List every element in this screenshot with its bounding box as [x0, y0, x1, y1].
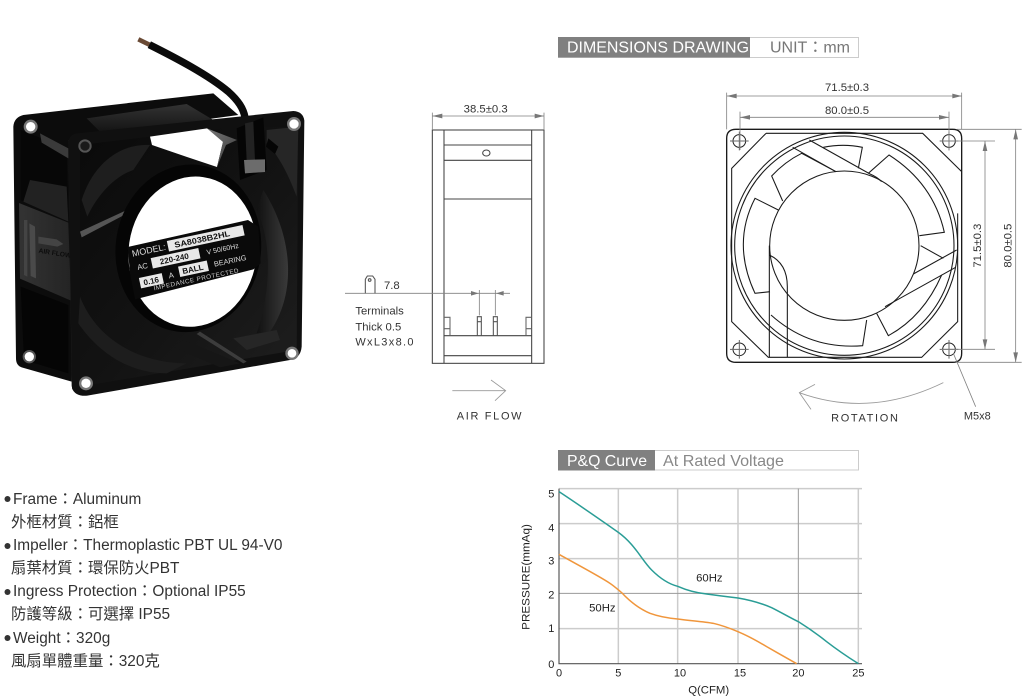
dimension: depth 38.5	[432, 104, 544, 130]
terminals note: Thick 0.5	[355, 321, 401, 333]
fan outline	[727, 129, 962, 362]
specification list	[4, 491, 282, 670]
header: dimensions drawing: UNIT：mm	[770, 40, 850, 56]
struts	[769, 140, 957, 357]
screw callout	[953, 353, 991, 423]
spec: frame: 外框材質：鋁框	[11, 513, 119, 531]
curve labels: 60Hz	[696, 573, 723, 585]
front frame	[68, 111, 304, 396]
label band: BEARING	[213, 253, 247, 269]
y axis ticks: 2	[548, 589, 554, 601]
y axis title: PRESSURE(mmAq)	[521, 524, 533, 630]
air flow arrow: AIR FLOW	[457, 411, 523, 423]
rear frame inner shading	[87, 104, 213, 132]
side view body	[432, 130, 544, 363]
50Hz label: 50Hz	[589, 602, 616, 614]
spec: ingress protection: 防護等級：可選擇 IP55	[11, 604, 170, 623]
spec: impeller: 扇葉材質：環保防火PBT	[11, 559, 180, 577]
rotation arrow: ROTATION	[831, 413, 900, 425]
terminals note: Terminals	[355, 306, 404, 318]
y axis ticks: 4	[548, 523, 554, 535]
product photo: axial fan	[13, 39, 304, 396]
dimension: height 80.0: 80.0±0.5	[1003, 224, 1015, 268]
front view drawing	[727, 82, 1022, 425]
header: dimensions drawing	[558, 37, 858, 58]
x axis ticks: 20	[792, 668, 804, 680]
spec: impeller	[4, 537, 282, 577]
x axis ticks: 10	[674, 668, 686, 680]
spec: weight: Weight：320g	[13, 630, 110, 647]
spec: ingress protection: Ingress Protection：Optional IP55	[13, 583, 246, 600]
hub white label	[119, 168, 267, 335]
x axis ticks: 5	[615, 668, 621, 680]
dimension: height 71.5: 71.5±0.3	[972, 224, 984, 268]
grey blade behind opening	[207, 128, 237, 167]
x axis title: Q(CFM)	[688, 684, 729, 696]
terminals note	[355, 306, 415, 349]
label band: AC	[136, 261, 149, 272]
dimension: height 80.0	[957, 129, 1022, 362]
curve: 60Hz	[559, 492, 858, 664]
dimension: height 71.5	[942, 141, 995, 349]
y axis ticks: 5	[548, 488, 554, 500]
P&Q line chart	[521, 488, 864, 696]
hub ring	[105, 155, 272, 342]
label band: A	[168, 270, 176, 280]
y axis ticks	[548, 488, 554, 671]
y axis ticks: 0	[548, 659, 554, 671]
curve: 50Hz	[559, 554, 797, 664]
frame interior	[80, 127, 298, 385]
y axis ticks: 1	[548, 623, 554, 635]
side panel with air flow mark	[19, 130, 80, 387]
dimension: depth 38.5: 38.5±0.3	[464, 104, 508, 116]
label band: MODEL:	[131, 242, 167, 259]
label band: IMPEDANCE PROTECTED	[153, 267, 240, 292]
spec: impeller: Impeller：Thermoplastic PBT UL 94-V0	[13, 537, 282, 554]
label band: SA8038B2HL	[174, 229, 231, 250]
label band: 0.16	[143, 275, 160, 287]
label band: BALL	[182, 263, 204, 276]
y axis ticks: 3	[548, 555, 554, 567]
side panel with air flow mark: AIR FLOW	[38, 248, 72, 260]
grid	[559, 489, 862, 664]
header: P&Q curve: P&Q Curve	[567, 453, 647, 470]
lead wires	[138, 39, 245, 117]
x axis ticks: 15	[734, 668, 746, 680]
terminals note: WxL3x8.0	[355, 337, 415, 349]
spec: weight: 風扇單體重量：320克	[11, 652, 160, 670]
dimension: width 71.5	[727, 82, 962, 129]
spec: ingress protection	[4, 583, 246, 623]
blades and struts	[78, 117, 298, 373]
dimension: width 71.5: 71.5±0.3	[825, 82, 869, 94]
top opening	[150, 128, 223, 167]
header: P&Q curve: At Rated Voltage	[663, 453, 784, 470]
air flow arrow	[452, 380, 523, 423]
label band: 220-240	[159, 251, 190, 266]
dimension: terminal spacing 7.8	[345, 276, 510, 315]
corner holes	[23, 117, 301, 390]
header: P&Q curve	[558, 450, 858, 470]
rotation arrow	[799, 383, 943, 425]
header: dimensions drawing: DIMENSIONS DRAWING	[567, 40, 749, 56]
dimension: width 80.0: 80.0±0.5	[825, 105, 869, 117]
label band	[128, 220, 261, 299]
mounting holes	[730, 132, 958, 359]
x axis ticks: 25	[852, 668, 864, 680]
screw callout: M5x8	[964, 411, 991, 423]
side view drawing	[345, 104, 544, 423]
x axis ticks	[556, 668, 864, 680]
dimension: terminal spacing 7.8: 7.8	[384, 280, 400, 292]
x axis ticks: 0	[556, 668, 562, 680]
spec: frame: Frame：Aluminum	[13, 491, 141, 508]
blades	[743, 145, 944, 346]
spec: frame	[4, 491, 141, 531]
label band: V 50/60Hz	[206, 243, 240, 257]
dimension: width 80.0	[740, 105, 949, 150]
rear frame	[13, 93, 238, 382]
spec: weight	[4, 630, 160, 670]
